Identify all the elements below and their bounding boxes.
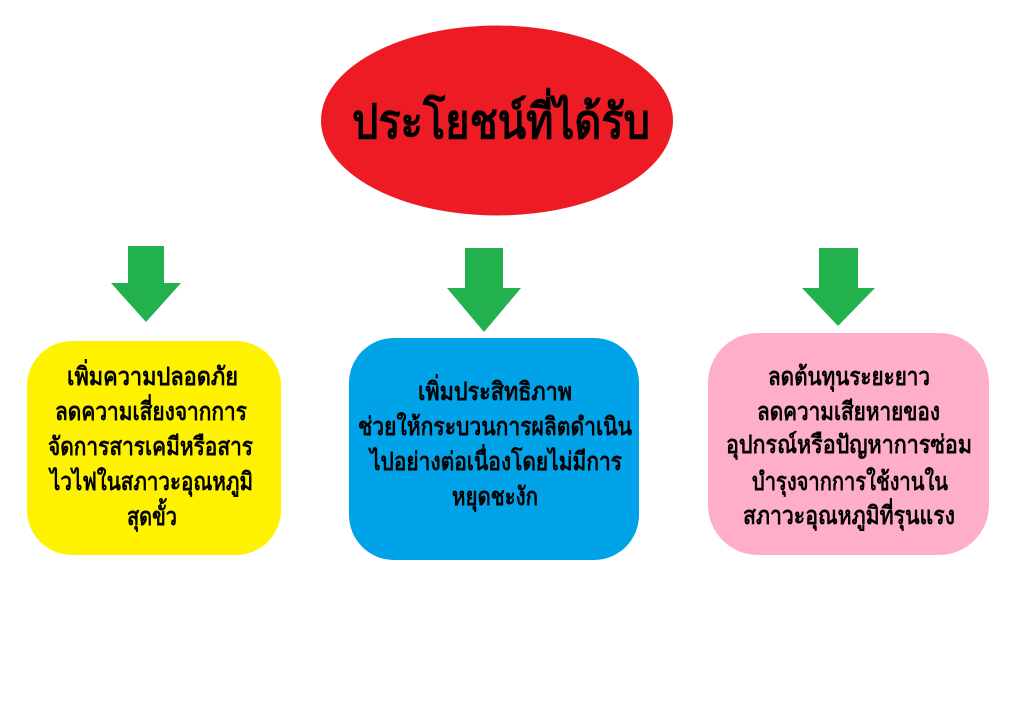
panel: cost: ลดความเสียหายของ [757, 398, 940, 426]
panel: cost: บำรุงจากการใช้งานใน [752, 466, 948, 498]
title oval: ประโยชน์ที่ได้รับ [352, 87, 650, 149]
panel: cost: ลดต้นทุนระยะยาว [768, 363, 930, 393]
title oval [321, 26, 673, 216]
panel: safety: เพิ่มความปลอดภัย [67, 359, 238, 391]
panel: efficiency: เพิ่มประสิทธิภาพ [418, 374, 572, 406]
arrow: to safety panel [111, 246, 181, 322]
panel: safety: สุดขั้ว [127, 497, 177, 533]
panel: efficiency: ช่วยให้กระบวนการผลิตดำเนิน [358, 411, 632, 441]
panel: cost: สภาวะอุณหภูมิที่รุนแรง [743, 498, 955, 532]
panel: efficiency: หยุดชะงัก [452, 484, 538, 513]
panel: safety: ลดความเสี่ยงจากการ [55, 394, 247, 426]
panel: efficiency: ไปอย่างต่อเนื่องโดยไม่มีการ [367, 444, 622, 476]
panel: efficiency [349, 338, 639, 560]
panel: cost [708, 333, 989, 555]
panel: safety: ไวไฟในสภาวะอุณหภูมิ [48, 466, 253, 498]
arrow: to efficiency panel [447, 248, 521, 332]
panel: safety [27, 341, 281, 555]
panel: safety: จัดการสารเคมีหรือสาร [48, 433, 253, 461]
arrow: to cost panel [802, 248, 875, 326]
panel: cost: อุปกรณ์หรือปัญหาการซ่อม [726, 430, 972, 461]
